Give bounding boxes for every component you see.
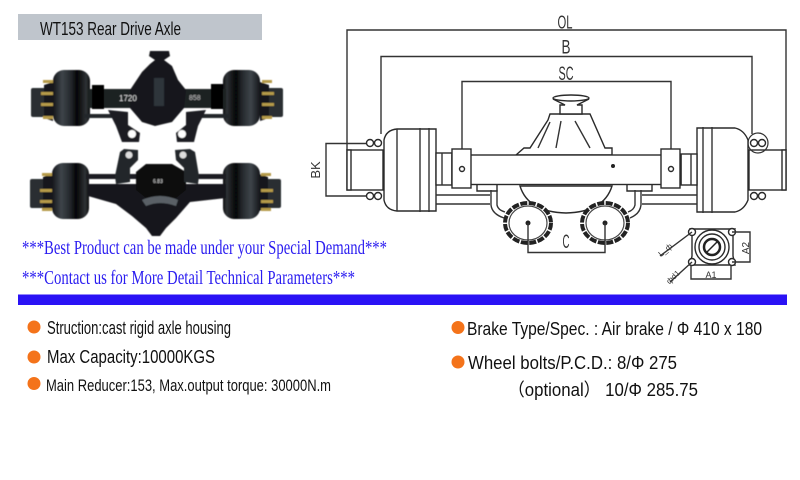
dimension line: BK: BK [308,161,323,179]
dimension line: B: B [562,38,570,58]
flange detail view: L_ф [657,241,675,259]
dimension line: BK [308,144,368,196]
spec: capacity: Max Capacity:10000KGS [47,347,215,367]
axle right hub [748,133,786,200]
right spring seat [661,149,680,188]
dimension line: SC [462,64,671,168]
spec: wheel bolts: Wheel bolts/P.C.D.: 8/Φ 275 [468,353,677,373]
photo: axle front view: 858 [189,95,201,102]
spec: reducer: Main Reducer:153, Max.output torque: 30000N.m [46,376,331,395]
photo: axle rear view: 6.83 [153,179,163,185]
brake pipes [491,190,641,218]
spec: wheel bolts [452,353,698,400]
title banner [18,14,262,40]
pinion housing [516,95,612,155]
flange detail view [657,228,752,286]
axle right brake drum [681,127,748,213]
spec: structure: Struction:cast rigid axle housing [47,318,231,338]
flange detail view: фd1 [665,268,682,286]
technical drawing: axle dimensions [308,12,786,286]
spec: wheel bolts: （optional） 10/Φ 285.75 [508,380,698,400]
flange detail view: A1 [705,270,717,280]
dimension line: OL: OL [558,12,572,32]
axle left brake drum [384,128,452,212]
dimension line: SC: SC [558,64,574,85]
blue divider bar [18,294,787,305]
photo: axle front view [31,51,283,142]
differential bowl [520,186,612,213]
brake chambers with C dimension [505,203,628,253]
axle tube [452,155,681,184]
promo text: ***Contact us for More Detail Technical Parameters*** [22,267,355,289]
dimension line: OL [347,12,786,150]
spring seat plates [477,184,652,191]
spec: brake: Brake Type/Spec. : Air brake / Φ 410 x 180 [467,319,762,339]
photo: axle rear view [30,149,281,236]
promo text: ***Best Product can be made under your Special Demand*** [22,237,387,259]
photo: axle front view: 1720 [119,94,137,103]
lower rods [436,195,697,204]
axle left hub [347,140,383,200]
spec: structure [28,318,231,338]
flange detail view: A2 [741,241,752,254]
promo text [22,237,387,289]
brake chambers with C dimension: C [562,232,570,253]
left spring seat [452,149,471,188]
title banner: WT153 Rear Drive Axle [40,19,181,39]
dimension line: B [381,38,752,134]
